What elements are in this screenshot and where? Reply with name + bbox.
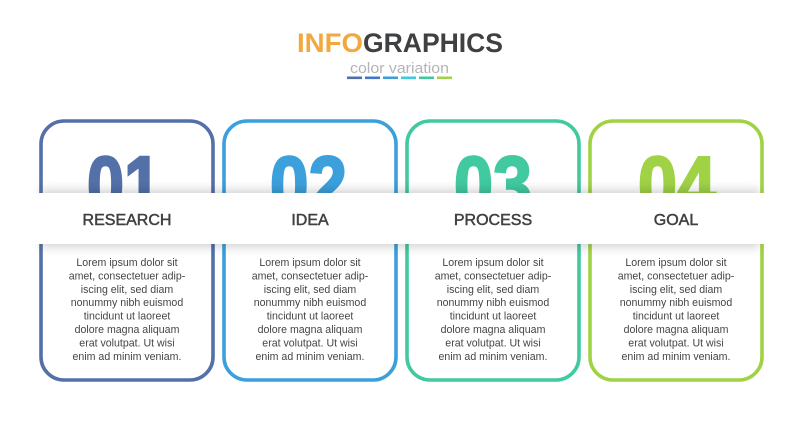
title: INFO <box>297 28 363 58</box>
card 1 body text: nonummy nibh euismod <box>71 297 183 309</box>
card 4 body text: erat volutpat. Ut wisi <box>628 337 724 349</box>
color variation dashes <box>347 76 452 79</box>
card 1 body text: enim ad minim veniam. <box>73 351 181 363</box>
card 4 body text: dolore magna aliquam <box>624 324 729 336</box>
card 3 body text: tincidunt ut laoreet <box>450 311 536 323</box>
panel: card 4 goal <box>590 121 762 380</box>
label: process: PROCESS <box>454 212 532 229</box>
card 3 body text: enim ad minim veniam. <box>439 351 547 363</box>
card 4 body text: tincidunt ut laoreet <box>633 311 719 323</box>
card 2 body text: nonummy nibh euismod <box>254 297 366 309</box>
label: goal: GOAL <box>654 212 698 229</box>
card 2 body text: iscing elit, sed diam <box>264 284 356 296</box>
card 1 body text: dolore magna aliquam <box>75 324 180 336</box>
label: idea: IDEA <box>291 212 329 229</box>
card 3 body text: dolore magna aliquam <box>441 324 546 336</box>
card 3 body text: nonummy nibh euismod <box>437 297 549 309</box>
card 3 body text <box>435 257 552 363</box>
card 2 body text: Lorem ipsum dolor sit <box>259 257 361 269</box>
card 4 body text: nonummy nibh euismod <box>620 297 732 309</box>
card 1 number: 01 <box>87 140 161 229</box>
card 2 number: 02 <box>270 140 347 229</box>
card 4 number: 04 <box>638 140 716 229</box>
card 3 number: 03 <box>454 140 532 229</box>
card 2 body text: dolore magna aliquam <box>258 324 363 336</box>
card 4 body text <box>618 257 735 363</box>
title <box>297 28 503 58</box>
card 1 body text: erat volutpat. Ut wisi <box>79 337 175 349</box>
card 2 body text: tincidunt ut laoreet <box>267 311 353 323</box>
label: research: RESEARCH <box>83 212 171 229</box>
card 4 body text: enim ad minim veniam. <box>622 351 730 363</box>
card 2 body text: enim ad minim veniam. <box>256 351 364 363</box>
card 1 body text: tincidunt ut laoreet <box>84 311 170 323</box>
subtitle: color variation <box>350 60 449 77</box>
card 2 body text <box>252 257 369 363</box>
card 3 body text: Lorem ipsum dolor sit <box>442 257 544 269</box>
card 1 outline <box>41 121 213 380</box>
band shadow <box>40 190 760 247</box>
card 3 body text: erat volutpat. Ut wisi <box>445 337 541 349</box>
card 1 body text: Lorem ipsum dolor sit <box>76 257 178 269</box>
card 3 body text: amet, consectetuer adip- <box>435 270 552 282</box>
card 4 outline <box>590 121 762 380</box>
card 4 body text: iscing elit, sed diam <box>630 284 722 296</box>
card 1 body text <box>69 257 186 363</box>
panel: card 3 process <box>407 121 579 380</box>
card 1 body text: iscing elit, sed diam <box>81 284 173 296</box>
panel: card 1 research <box>41 121 213 380</box>
card 3 body text: iscing elit, sed diam <box>447 284 539 296</box>
card 2 outline <box>224 121 396 380</box>
card 4 body text: Lorem ipsum dolor sit <box>625 257 727 269</box>
card 2 body text: amet, consectetuer adip- <box>252 270 369 282</box>
title: GRAPHICS <box>363 28 503 58</box>
panel: card 2 idea <box>224 121 396 380</box>
white label band <box>0 193 800 244</box>
card 4 body text: amet, consectetuer adip- <box>618 270 735 282</box>
card 1 body text: amet, consectetuer adip- <box>69 270 186 282</box>
card 3 outline <box>407 121 579 380</box>
card 2 body text: erat volutpat. Ut wisi <box>262 337 358 349</box>
